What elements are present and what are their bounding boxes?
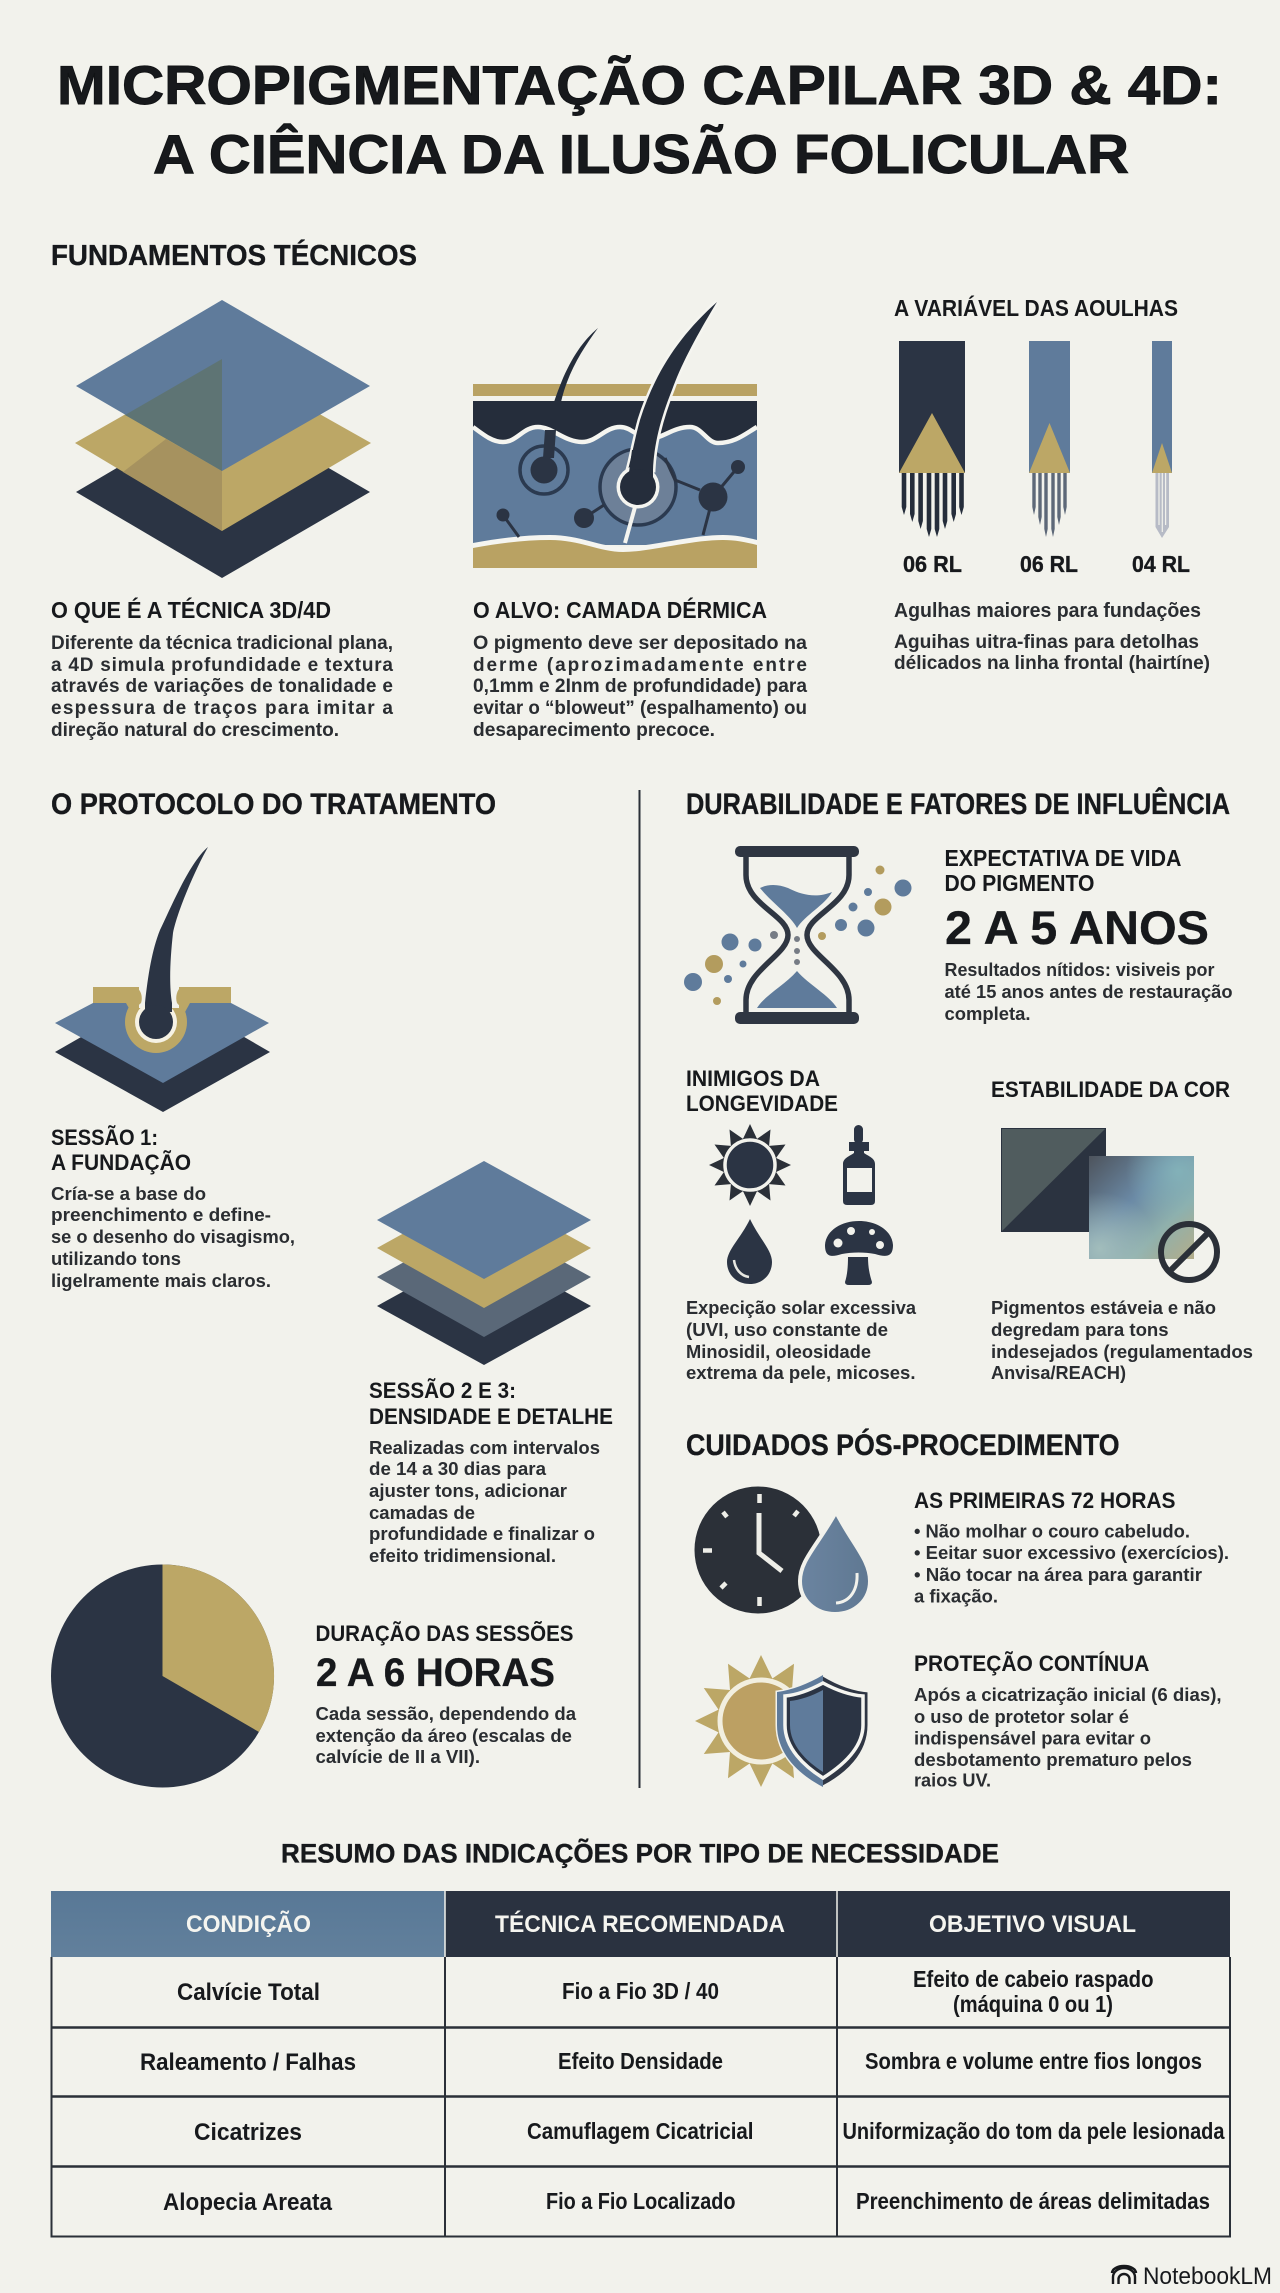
text block: agulhas [894,600,1210,674]
text block: expectativa de vida: EXPECTATIVA DE VIDA [944,845,1182,871]
table header: CONDIÇÃO [186,1910,311,1938]
text block: proteção contínua [914,1651,1222,1790]
text block: o alvo camada dérmica: desaparecimento precoce. [473,720,715,741]
text block: estabilidade da cor: Anvisa/REACH) [991,1363,1126,1383]
row: cicatrizes [194,2118,1225,2146]
text block: o que é a técnica: Diferente da técnica tradicional plana, [51,633,393,654]
text block: proteção contínua: desbotamento prematuro pelos [914,1750,1192,1770]
row: alopecia areata: Preenchimento de áreas delimitadas [856,2188,1210,2214]
text block: as primeiras 72 horas: AS PRIMEIRAS 72 HORAS [914,1488,1176,1513]
row: cicatrizes: Camuflagem Cicatricial [527,2118,754,2144]
panel: fundamentos técnicos [51,238,1210,741]
text block: sessão 1 [51,1125,295,1291]
heading: resumo das indicações: RESUMO DAS INDICAÇÕES POR TIPO DE NECESSIDADE [281,1838,999,1868]
row: calvície total: Fio a Fio 3D / 40 [562,1978,719,2004]
row: raleamento [140,2048,1202,2076]
icon: hourglass with pigment dots [684,846,912,1024]
text block: as primeiras 72 horas: • Eeitar suor excessivo (exercícios). [914,1543,1229,1563]
text block: sessão 1: ligelramente mais claros. [51,1271,271,1291]
heading: inimigos da longevidade: LONGEVIDADE [686,1091,838,1116]
text block: proteção contínua: raios UV. [914,1770,991,1790]
row: alopecia areata: Alopecia Areata [163,2189,333,2216]
text block: duração das sessões [316,1621,577,1767]
text block: duração das sessões: extenção da áreo (escalas de [316,1726,572,1746]
title [57,54,1222,185]
text block: expectativa de vida: Resultados nítidos: visiveis por [944,960,1214,980]
icon: layered skin diamonds [75,300,371,578]
text block: sessão 2 e 3: DENSIDADE E DETALHE [369,1404,613,1429]
icon: sun [709,1124,791,1206]
text block: o alvo camada dérmica: O pigmento deve ser depositado na [473,633,807,654]
text block: expectativa de vida: 2 A 5 ANOS [945,901,1209,954]
icon: needle 06 RL medium [1029,341,1070,537]
icon: dropper bottle [843,1125,875,1205]
table header: OBJETIVO VISUAL [929,1911,1136,1938]
row: raleamento: Efeito Densidade [558,2048,723,2074]
text block: expectativa de vida: completa. [944,1004,1030,1024]
text block: sessão 1: preenchimento e define- [51,1205,271,1225]
heading: inimigos da longevidade: INIMIGOS DA [686,1066,820,1091]
table header [51,1891,1230,1957]
panel: cuidados pós-procedimento [686,1428,1229,1790]
text block: inimigos da longevidade: (UVI, uso constante de [686,1320,888,1340]
row: cicatrizes: Cicatrizes [194,2119,302,2146]
row: raleamento: Raleamento / Falhas [140,2049,356,2076]
text block: sessão 2 e 3: SESSÃO 2 E 3: [369,1378,516,1403]
text block: estabilidade da cor [991,1298,1253,1383]
text block: estabilidade da cor: degredam para tons [991,1320,1169,1340]
text block: sessão 2 e 3 [369,1378,613,1566]
heading: inimigos da longevidade [686,1066,838,1116]
icon: needle 04 RL thin [1152,341,1172,538]
text block: o que é a técnica: direção natural do crescimento. [51,720,339,741]
heading: estabilidade da cor: ESTABILIDADE DA COR [991,1077,1230,1102]
text block: sessão 2 e 3: efeito tridimensional. [369,1546,556,1566]
pie chart: duração [51,1564,274,1788]
row: alopecia areata: Fio a Fio Localizado [546,2188,736,2214]
text block: inimigos da longevidade: extrema da pele, micoses. [686,1363,916,1383]
text block: as primeiras 72 horas [914,1488,1229,1606]
icon: sun and shield [695,1655,869,1787]
text block: proteção contínua: Após a cicatrização inicial (6 dias), [914,1685,1222,1705]
text block: duração das sessões: Cada sessão, dependendo da [316,1704,577,1724]
icon: oil drop [727,1219,772,1284]
text block: sessão 2 e 3: camadas de [369,1503,475,1523]
text block: o que é a técnica: espessura de traços para imitar a [51,698,393,719]
icon: mushroom [825,1221,893,1285]
needle labels [903,551,1190,577]
text block: sessão 2 e 3: ajuster tons, adicionar [369,1481,567,1501]
text block: proteção contínua: o uso de protetor solar é [914,1707,1129,1727]
icon: skin cross-section with hair follicles [473,302,757,568]
panel: durabilidade e fatores [684,787,1253,1383]
text block: sessão 2 e 3: de 14 a 30 dias para [369,1459,547,1479]
text block: agulhas: délicados na linha frontal (hairtíne) [894,653,1210,674]
text block: as primeiras 72 horas: a fixação. [914,1586,998,1606]
text block: o que é a técnica: a 4D simula profundidade e textura [51,655,393,676]
text block: duração das sessões: calvície de II a VII). [316,1747,480,1767]
row: calvície total: (máquina 0 ou 1) [953,1991,1113,2017]
table header: TÉCNICA RECOMENDADA [495,1910,785,1938]
row: calvície total: Calvície Total [177,1979,320,2006]
text block: as primeiras 72 horas: • Não tocar na área para garantir [914,1565,1202,1585]
heading: fundamentos técnicos: FUNDAMENTOS TÉCNICOS [51,238,417,272]
text block: inimigos da longevidade: Minosidil, oleosidade [686,1342,871,1362]
icon: colour swatches with prohibition sign [1001,1128,1217,1280]
text block: o alvo camada dérmica [473,596,807,741]
logo: NotebookLM: NotebookLM [1143,2263,1272,2290]
icon: session 2-3 layered stack [377,1161,591,1365]
needle labels: 06 RL [1020,551,1078,577]
text block: proteção contínua: indispensável para evitar o [914,1728,1151,1748]
text block: o alvo camada dérmica: 0,1mm e 2Inm de profundidade) para [473,676,807,697]
text block: sessão 1: Cría-se a base do [51,1184,206,1204]
text block: estabilidade da cor: indesejados (regulamentados [991,1342,1253,1362]
text block: sessão 1: SESSÃO 1: [51,1125,158,1150]
text block: expectativa de vida: DO PIGMENTO [944,870,1094,896]
text block: agulhas: Aguihas uitra-finas para detolhas [894,632,1199,653]
text block: sessão 1: utilizando tons [51,1249,181,1269]
heading: protocolo: O PROTOCOLO DO TRATAMENTO [51,788,496,821]
title: A CIÊNCIA DA ILUSÃO FOLICULAR [153,123,1129,185]
text block: o alvo camada dérmica: evitar o “bloweut” (espalhamento) ou [473,698,807,719]
text block: o que é a técnica: O QUE É A TÉCNICA 3D/4D [51,596,331,623]
row: calvície total: Efeito de cabeio raspado [913,1966,1154,1992]
text block: o alvo camada dérmica: O ALVO: CAMADA DÉRMICA [473,596,767,623]
icon: session 1 follicle on layers [55,847,270,1112]
text block: o que é a técnica: através de variações de tonalidade e [51,676,393,697]
row: alopecia areata [163,2188,1210,2216]
text block: sessão 1: A FUNDAÇÃO [51,1150,191,1175]
text block: as primeiras 72 horas: • Não molhar o couro cabeludo. [914,1522,1190,1542]
heading: cuidados: CUIDADOS PÓS-PROCEDIMENTO [686,1428,1120,1462]
text block: duração das sessões: 2 A 6 HORAS [316,1651,555,1695]
text block: o que é a técnica [51,596,393,741]
text block: sessão 2 e 3: Realizadas com intervalos [369,1438,600,1458]
needle labels: 04 RL [1132,551,1190,577]
icon: needle 06 RL large [899,341,965,537]
row: raleamento: Sombra e volume entre fios longos [865,2048,1202,2074]
row: calvície total [177,1966,1154,2017]
text block: o alvo camada dérmica: derme (aprozimadamente entre [473,655,807,676]
heading: a variável das agulhas: A VARIÁVEL DAS AOULHAS [894,294,1178,321]
text block: inimigos da longevidade [686,1298,917,1383]
title: MICROPIGMENTAÇÃO CAPILAR 3D & 4D: [57,54,1222,116]
table: resumo [51,1891,1230,2236]
text block: agulhas: Agulhas maiores para fundações [894,600,1201,622]
text block: sessão 2 e 3: profundidade e finalizar o [369,1524,595,1544]
text block: expectativa de vida: até 15 anos antes de restauração [944,982,1233,1002]
text block: duração das sessões: DURAÇÃO DAS SESSÕES [316,1621,574,1646]
panel: o protocolo do tratamento [51,788,613,1788]
text block: proteção contínua: PROTEÇÃO CONTÍNUA [914,1651,1150,1676]
icon: clock with water drop [694,1486,870,1614]
text block: inimigos da longevidade: Expecição solar excessiva [686,1298,917,1318]
needle labels: 06 RL [903,551,962,577]
text block: estabilidade da cor: Pigmentos estáveia e não [991,1298,1216,1318]
text block: sessão 1: se o desenho do visagismo, [51,1227,295,1247]
row: cicatrizes: Uniformização do tom da pele lesionada [842,2118,1225,2144]
text block: expectativa de vida [944,845,1233,1024]
